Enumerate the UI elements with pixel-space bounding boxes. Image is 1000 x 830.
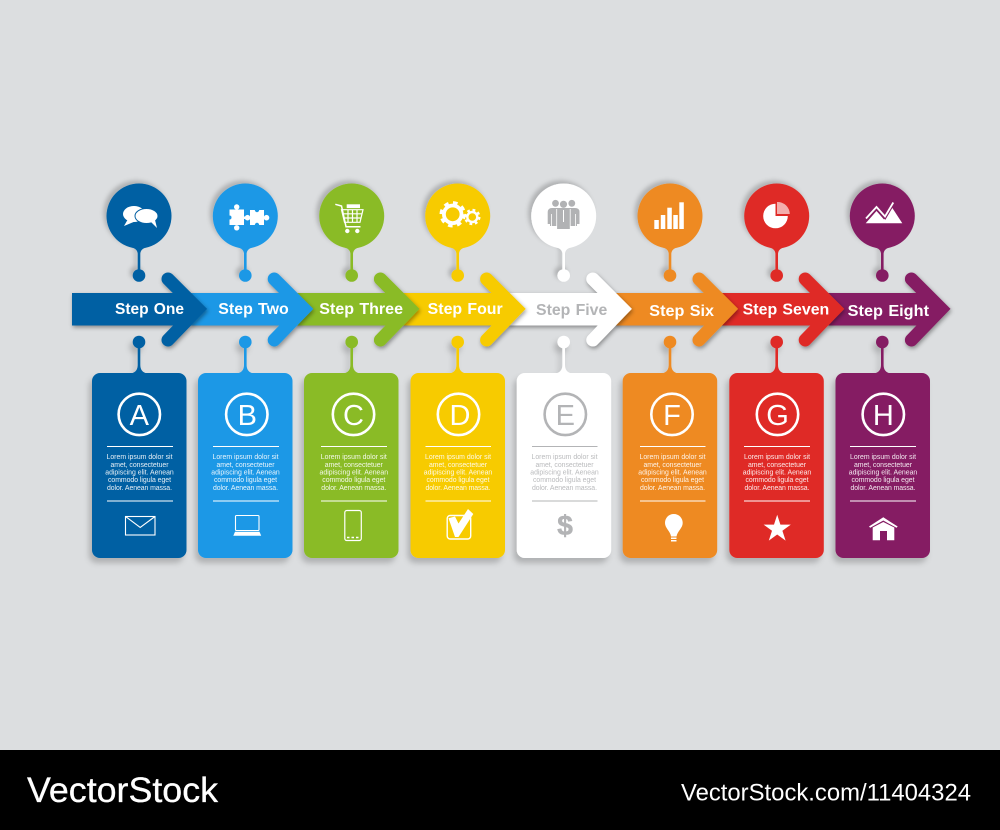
letter badge <box>545 394 586 435</box>
body text: adipiscing elit. Aenean <box>320 470 388 476</box>
letter badge <box>438 394 479 435</box>
pin: step four <box>425 184 490 282</box>
icon: speech bubbles <box>123 206 158 228</box>
body text: dolor. Aenean massa. <box>744 485 810 492</box>
letter badge <box>651 394 693 435</box>
panel: card D <box>410 336 505 558</box>
icon: shopping cart <box>335 204 363 233</box>
body text <box>743 446 811 501</box>
letter badge <box>119 394 160 435</box>
body text: amet, consectetuer <box>110 462 169 469</box>
body text: commodo ligula eget <box>108 477 171 484</box>
icon: group of people <box>548 200 580 229</box>
body text: adipiscing elit. Aenean <box>211 470 280 476</box>
body text: amet, consectetuer <box>854 462 913 469</box>
body text: commodo ligula eget <box>214 477 277 484</box>
pin: step eight <box>850 184 915 282</box>
icon: laptop <box>233 516 261 536</box>
panel: card E <box>517 336 611 558</box>
letter badge: B <box>238 400 257 432</box>
body text: commodo ligula eget <box>746 477 809 484</box>
arrow: step one <box>72 279 198 340</box>
icon: mountain line chart <box>866 202 902 223</box>
arrow: step three: Step Three <box>319 301 403 318</box>
letter badge <box>863 394 904 435</box>
footer logo: VectorStock <box>27 770 218 810</box>
body text: amet, consectetuer <box>216 462 275 469</box>
arrow: step four <box>403 279 517 340</box>
body text <box>638 446 707 501</box>
body text: Lorem ipsum dolor sit <box>850 454 916 461</box>
body text: Lorem ipsum dolor sit <box>425 454 491 461</box>
body text: Lorem ipsum dolor sit <box>212 454 279 461</box>
body text: dolor. Aenean massa. <box>850 485 916 492</box>
icon: light bulb <box>665 514 683 542</box>
arrow: step two: Step Two <box>218 301 289 318</box>
body text: amet, consectetuer <box>325 462 384 469</box>
body text: adipiscing elit. Aenean <box>530 470 599 476</box>
pin: step six <box>638 184 702 282</box>
body text: adipiscing elit. Aenean <box>638 470 707 476</box>
panel: card B <box>198 336 292 558</box>
letter badge: C <box>343 400 364 432</box>
icon: bar chart <box>654 202 684 229</box>
letter badge <box>333 394 374 435</box>
body text: dolor. Aenean massa. <box>532 485 597 492</box>
body text: commodo ligula eget <box>426 477 490 484</box>
body text <box>849 446 917 501</box>
body text: amet, consectetuer <box>429 462 488 469</box>
arrow: step six <box>615 279 729 340</box>
body text <box>530 446 599 501</box>
icon: house <box>869 517 898 540</box>
body text: commodo ligula eget <box>852 477 915 484</box>
letter badge <box>226 394 268 435</box>
body text: adipiscing elit. Aenean <box>105 470 174 476</box>
arrow: step eight: Step Eight <box>848 303 929 320</box>
body text: Lorem ipsum dolor sit <box>532 454 598 461</box>
pin: step five <box>531 184 596 282</box>
panel: card G <box>729 336 824 558</box>
letter badge <box>757 394 798 435</box>
arrow: step five <box>509 279 623 340</box>
body text: dolor. Aenean massa. <box>321 485 386 492</box>
body text: dolor. Aenean massa. <box>107 485 172 492</box>
body text: Lorem ipsum dolor sit <box>744 454 810 461</box>
arrow: step one: Step One <box>115 301 184 318</box>
panel: card C <box>304 336 398 558</box>
body text <box>320 446 388 501</box>
body text: Lorem ipsum dolor sit <box>640 454 706 461</box>
body text: commodo ligula eget <box>533 477 596 484</box>
letter badge: F <box>663 400 681 432</box>
arrow: step four: Step Four <box>428 301 503 318</box>
arrow: step three <box>296 279 410 340</box>
arrow: step seven: Step Seven <box>743 302 829 318</box>
panel: card H <box>836 336 930 558</box>
body text: adipiscing elit. Aenean <box>743 470 811 476</box>
body text <box>105 446 174 501</box>
arrow: step seven <box>721 279 835 340</box>
arrow: step five: Step Five <box>536 302 607 319</box>
body text <box>211 446 280 501</box>
icon: star <box>764 515 791 541</box>
letter badge: H <box>873 400 894 432</box>
body text: amet, consectetuer <box>748 462 807 469</box>
footer url: VectorStock.com/11404324 <box>681 780 971 807</box>
body text: dolor. Aenean massa. <box>640 485 705 492</box>
panel: card A <box>92 336 186 558</box>
body text: amet, consectetuer <box>536 462 594 469</box>
body text: Lorem ipsum dolor sit <box>321 454 387 461</box>
arrow: step six: Step Six <box>649 303 715 320</box>
pin: step one <box>106 184 172 282</box>
letter badge: A <box>130 400 150 432</box>
pin: step three <box>319 184 384 282</box>
body text: commodo ligula eget <box>322 477 385 484</box>
body text: amet, consectetuer <box>644 462 702 469</box>
icon: checkbox <box>447 509 473 539</box>
letter badge: D <box>450 400 470 432</box>
icon: puzzle pieces <box>228 204 269 230</box>
icon: envelope <box>126 516 155 535</box>
icon: smartphone <box>345 510 361 540</box>
body text: commodo ligula eget <box>641 477 704 484</box>
body text: dolor. Aenean massa. <box>213 485 278 492</box>
icon: gears <box>441 203 479 226</box>
footer bar <box>0 750 1000 830</box>
letter badge: G <box>766 400 789 432</box>
body text: dolor. Aenean massa. <box>426 485 491 492</box>
body text <box>424 446 492 501</box>
panel: card F <box>623 336 717 558</box>
letter badge: E <box>556 400 575 432</box>
pin: step two <box>213 184 278 282</box>
arrow: step eight <box>827 279 941 340</box>
body text: adipiscing elit. Aenean <box>849 470 917 476</box>
arrow: step two <box>190 279 304 340</box>
body text: adipiscing elit. Aenean <box>424 470 492 476</box>
icon: dollar sign: $ <box>557 510 573 541</box>
icon: pie chart <box>763 202 790 228</box>
body text: Lorem ipsum dolor sit <box>106 454 173 461</box>
pin: step seven <box>744 184 809 282</box>
